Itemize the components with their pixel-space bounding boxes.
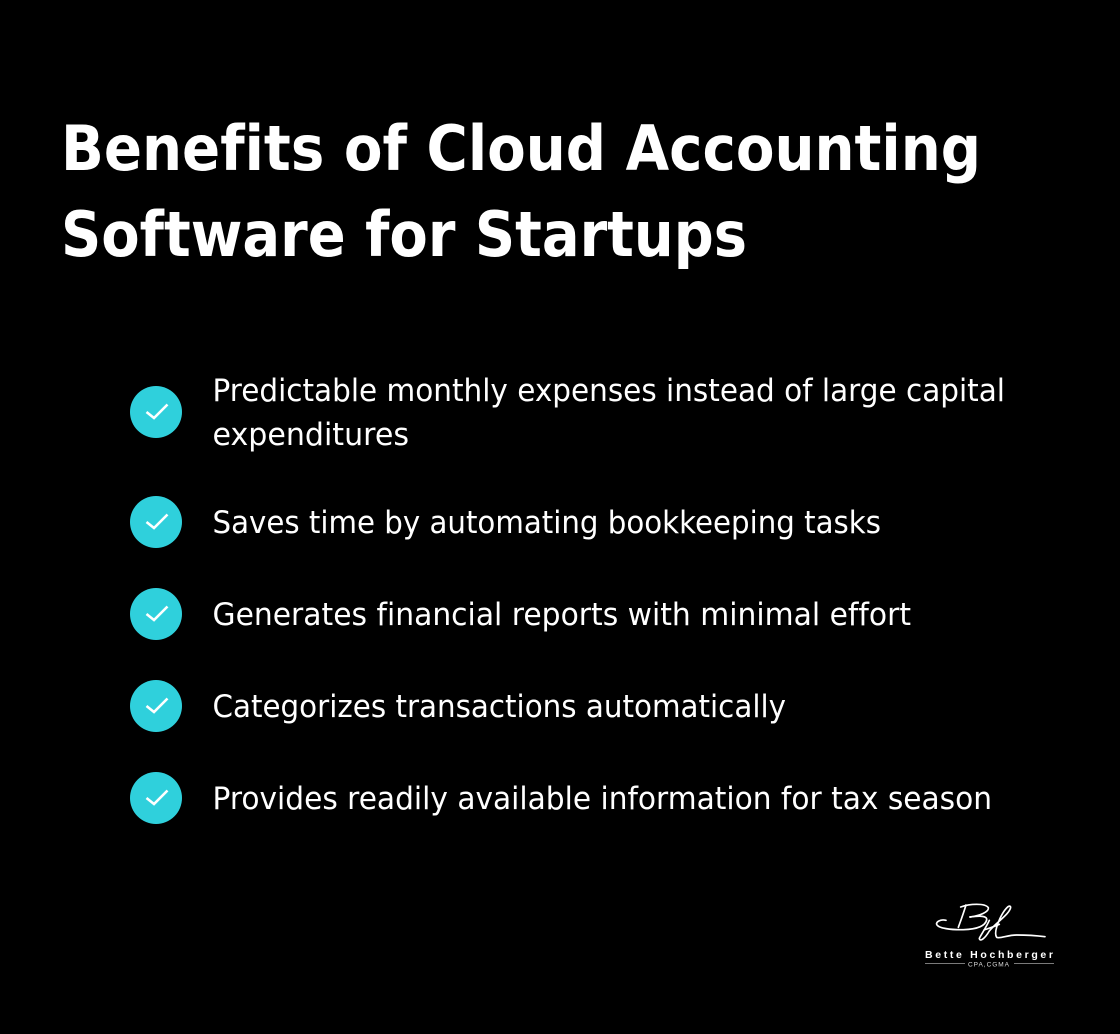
- item: financial reports: [130, 588, 911, 640]
- item: predictable monthly expenses: expenditures: [212, 417, 409, 453]
- title: Benefits of Cloud Accounting: [61, 112, 981, 185]
- item: tax season: Provides readily available information for tax season: [212, 781, 992, 817]
- item: saves time: Saves time by automating bookkeeping tasks: [212, 505, 881, 541]
- logo: Bette Hochberger signature: [925, 904, 1054, 968]
- item: predictable monthly expenses: [130, 373, 1005, 453]
- title: Software for Startups: [61, 198, 747, 271]
- item: predictable monthly expenses: Predictable monthly expenses instead of large capital: [212, 373, 1005, 409]
- item: saves time: [130, 496, 881, 548]
- item: categorizes transactions: Categorizes transactions automatically: [212, 689, 786, 725]
- benefits list: [130, 373, 1005, 824]
- text: Bette Hochberger: Bette Hochberger: [925, 949, 1053, 961]
- text: CPA, CGMA: CPA,CGMA: [968, 962, 1010, 968]
- item: financial reports: Generates financial reports with minimal effort: [212, 597, 911, 633]
- title: [61, 112, 981, 271]
- icon: BH signature mark: [937, 904, 1045, 940]
- item: categorizes transactions: [130, 680, 786, 732]
- item: tax season: [130, 772, 992, 824]
